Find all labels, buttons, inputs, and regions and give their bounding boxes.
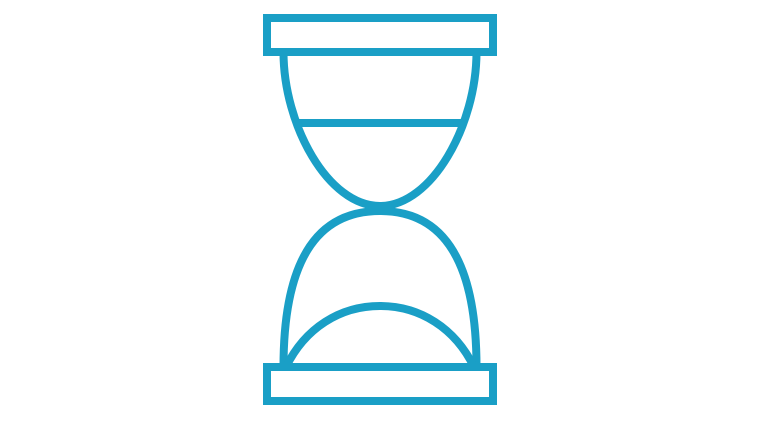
bottom cap xyxy=(267,367,493,401)
top cap xyxy=(267,18,493,52)
sand level in upper bulb xyxy=(296,119,464,127)
lower glass bulb xyxy=(284,211,476,367)
sand mound in lower bulb xyxy=(286,306,474,367)
upper glass bulb xyxy=(284,52,476,206)
